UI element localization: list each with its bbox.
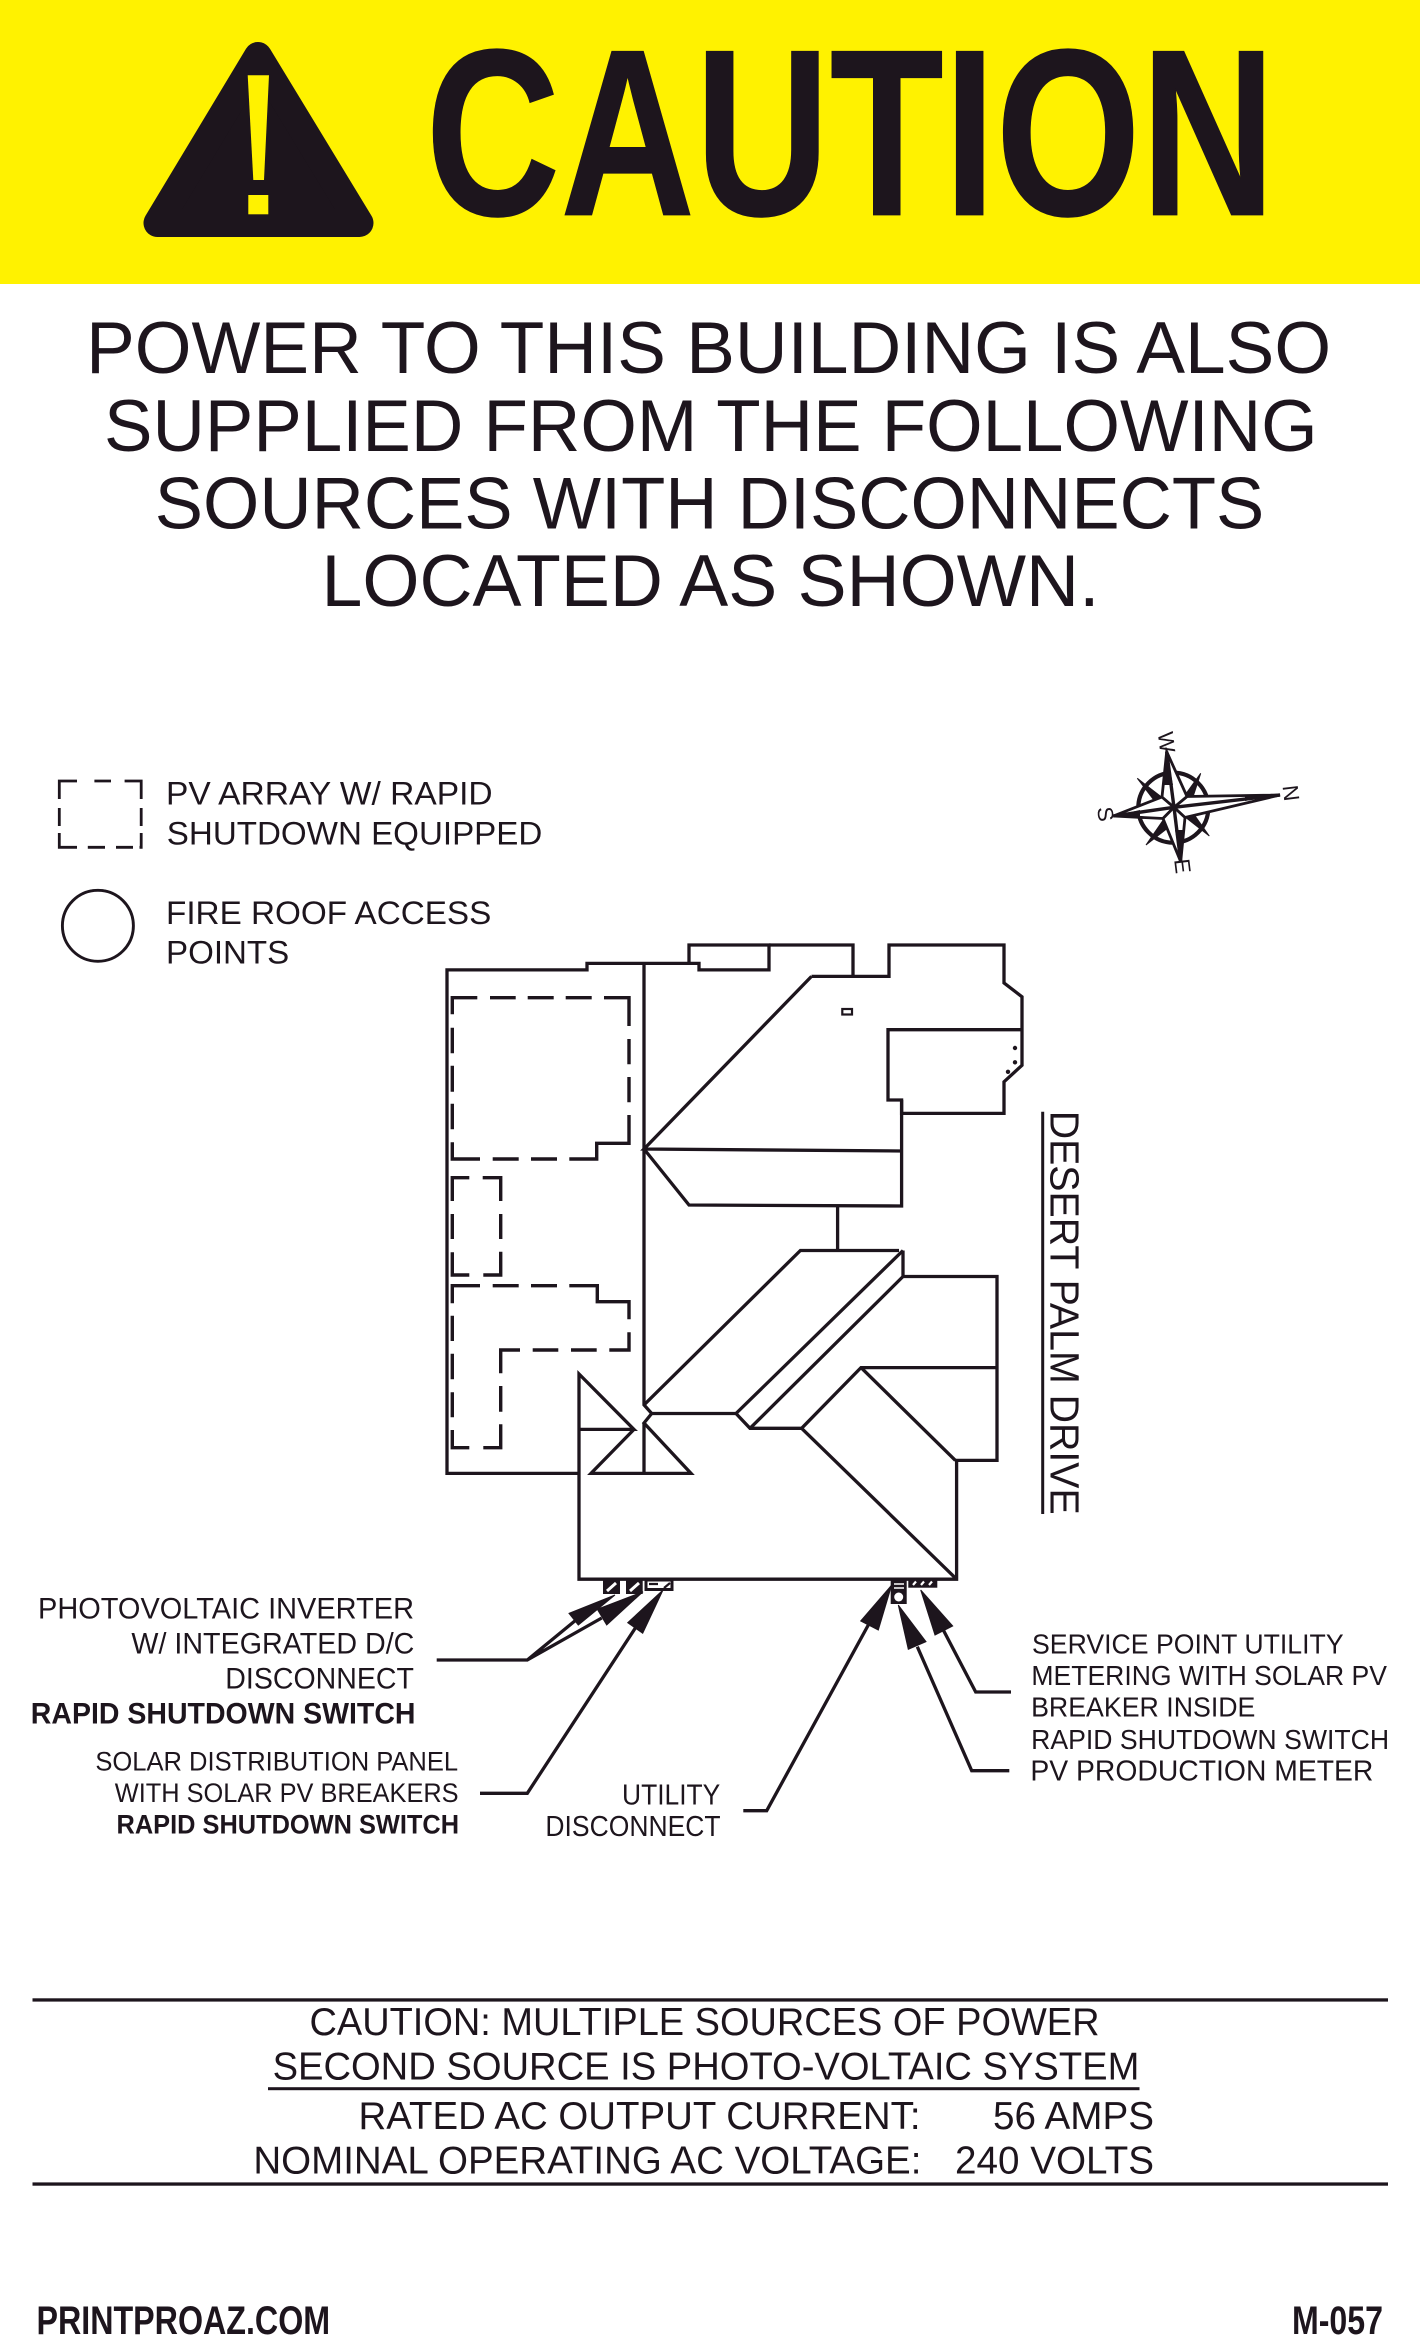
headline text block [86, 306, 1331, 622]
headline text block: POWER TO THIS BUILDING IS ALSO [86, 306, 1331, 389]
legend text: fire roof access: FIRE ROOF ACCESS [166, 895, 491, 931]
footer: part number: M-057 [1292, 2299, 1383, 2343]
arrow: service leader [921, 1590, 1011, 1692]
header band: caution [0, 0, 1420, 284]
callout: PV production meter: PV PRODUCTION METER [1030, 1756, 1373, 1788]
equipment boxes on wall [603, 1579, 937, 1604]
arrow: panel leader [480, 1590, 663, 1793]
callout: photovoltaic inverter: W/ INTEGRATED D/C [131, 1627, 414, 1660]
callout: service point utility metering: SERVICE POINT UTILITY [1032, 1628, 1344, 1659]
compass letters: E [1169, 857, 1196, 875]
headline text block: SOURCES WITH DISCONNECTS [155, 462, 1264, 545]
legend text: fire roof access [166, 895, 491, 970]
callout: photovoltaic inverter: RAPID SHUTDOWN SWITCH [31, 1697, 416, 1730]
headline text block: LOCATED AS SHOWN. [322, 539, 1100, 622]
compass letters [1092, 730, 1304, 875]
callout: service point utility metering: BREAKER INSIDE [1031, 1692, 1255, 1723]
headline text block: SUPPLIED FROM THE FOLLOWING [104, 384, 1318, 467]
ratings text: CAUTION: MULTIPLE SOURCES OF POWER [310, 2001, 1100, 2044]
callout: photovoltaic inverter [31, 1592, 643, 1730]
arrow: meter leader [898, 1605, 1009, 1771]
callout: solar distribution panel [95, 1590, 663, 1839]
arrows: inverter leaders [437, 1592, 643, 1660]
callout: photovoltaic inverter: DISCONNECT [225, 1663, 414, 1696]
callout: solar distribution panel: RAPID SHUTDOWN SWITCH [116, 1809, 459, 1839]
callout: utility disconnect [545, 1585, 892, 1843]
ratings text: NOMINAL OPERATING AC VOLTAGE: [253, 2139, 921, 2182]
ratings text [253, 2001, 1154, 2182]
roof detail dots [1006, 1046, 1017, 1074]
icon: compass rose [1092, 730, 1304, 875]
callout: utility disconnect: UTILITY [622, 1779, 720, 1811]
ratings panel [32, 1998, 1388, 2186]
callout: service point utility metering: RAPID SHUTDOWN SWITCH [1031, 1724, 1389, 1755]
roof plan diagram [447, 945, 1022, 1604]
building outline and roof lines [447, 945, 1022, 1579]
legend text: PV array [166, 775, 542, 851]
compass letters: W [1153, 730, 1180, 754]
callout: utility disconnect: DISCONNECT [545, 1811, 721, 1843]
legend text: PV array: PV ARRAY W/ RAPID [166, 775, 493, 811]
legend text: fire roof access: POINTS [166, 934, 289, 970]
compass letters: S [1092, 805, 1119, 823]
icon: dashed PV array symbol [59, 781, 141, 847]
legend text: PV array: SHUTDOWN EQUIPPED [167, 815, 542, 851]
arrow: utility leader [743, 1585, 892, 1811]
callout: solar distribution panel: WITH SOLAR PV BREAKERS [115, 1778, 459, 1808]
ratings text: 240 VOLTS [955, 2139, 1154, 2182]
PV array: dashed zones [452, 998, 629, 1448]
street label: desert palm drive: DESERT PALM DRIVE [1042, 1111, 1088, 1515]
ratings text: 56 AMPS [993, 2095, 1154, 2138]
compass letters: N [1278, 784, 1304, 802]
callout: photovoltaic inverter: PHOTOVOLTAIC INVERTER [38, 1592, 414, 1625]
ratings text: RATED AC OUTPUT CURRENT: [358, 2095, 920, 2138]
icon: warning triangle [158, 56, 360, 223]
icon: fire roof access circle [62, 890, 133, 961]
ratings text: SECOND SOURCE IS PHOTO-VOLTAIC SYSTEM [273, 2045, 1139, 2088]
callout: service point utility metering: METERING WITH SOLAR PV [1031, 1660, 1388, 1691]
callout: PV production meter [898, 1605, 1373, 1788]
legend [59, 775, 542, 970]
callout: service point utility metering [921, 1590, 1389, 1755]
callout: solar distribution panel: SOLAR DISTRIBUTION PANEL [95, 1747, 458, 1777]
footer: website: PRINTPROAZ.COM [36, 2299, 330, 2343]
